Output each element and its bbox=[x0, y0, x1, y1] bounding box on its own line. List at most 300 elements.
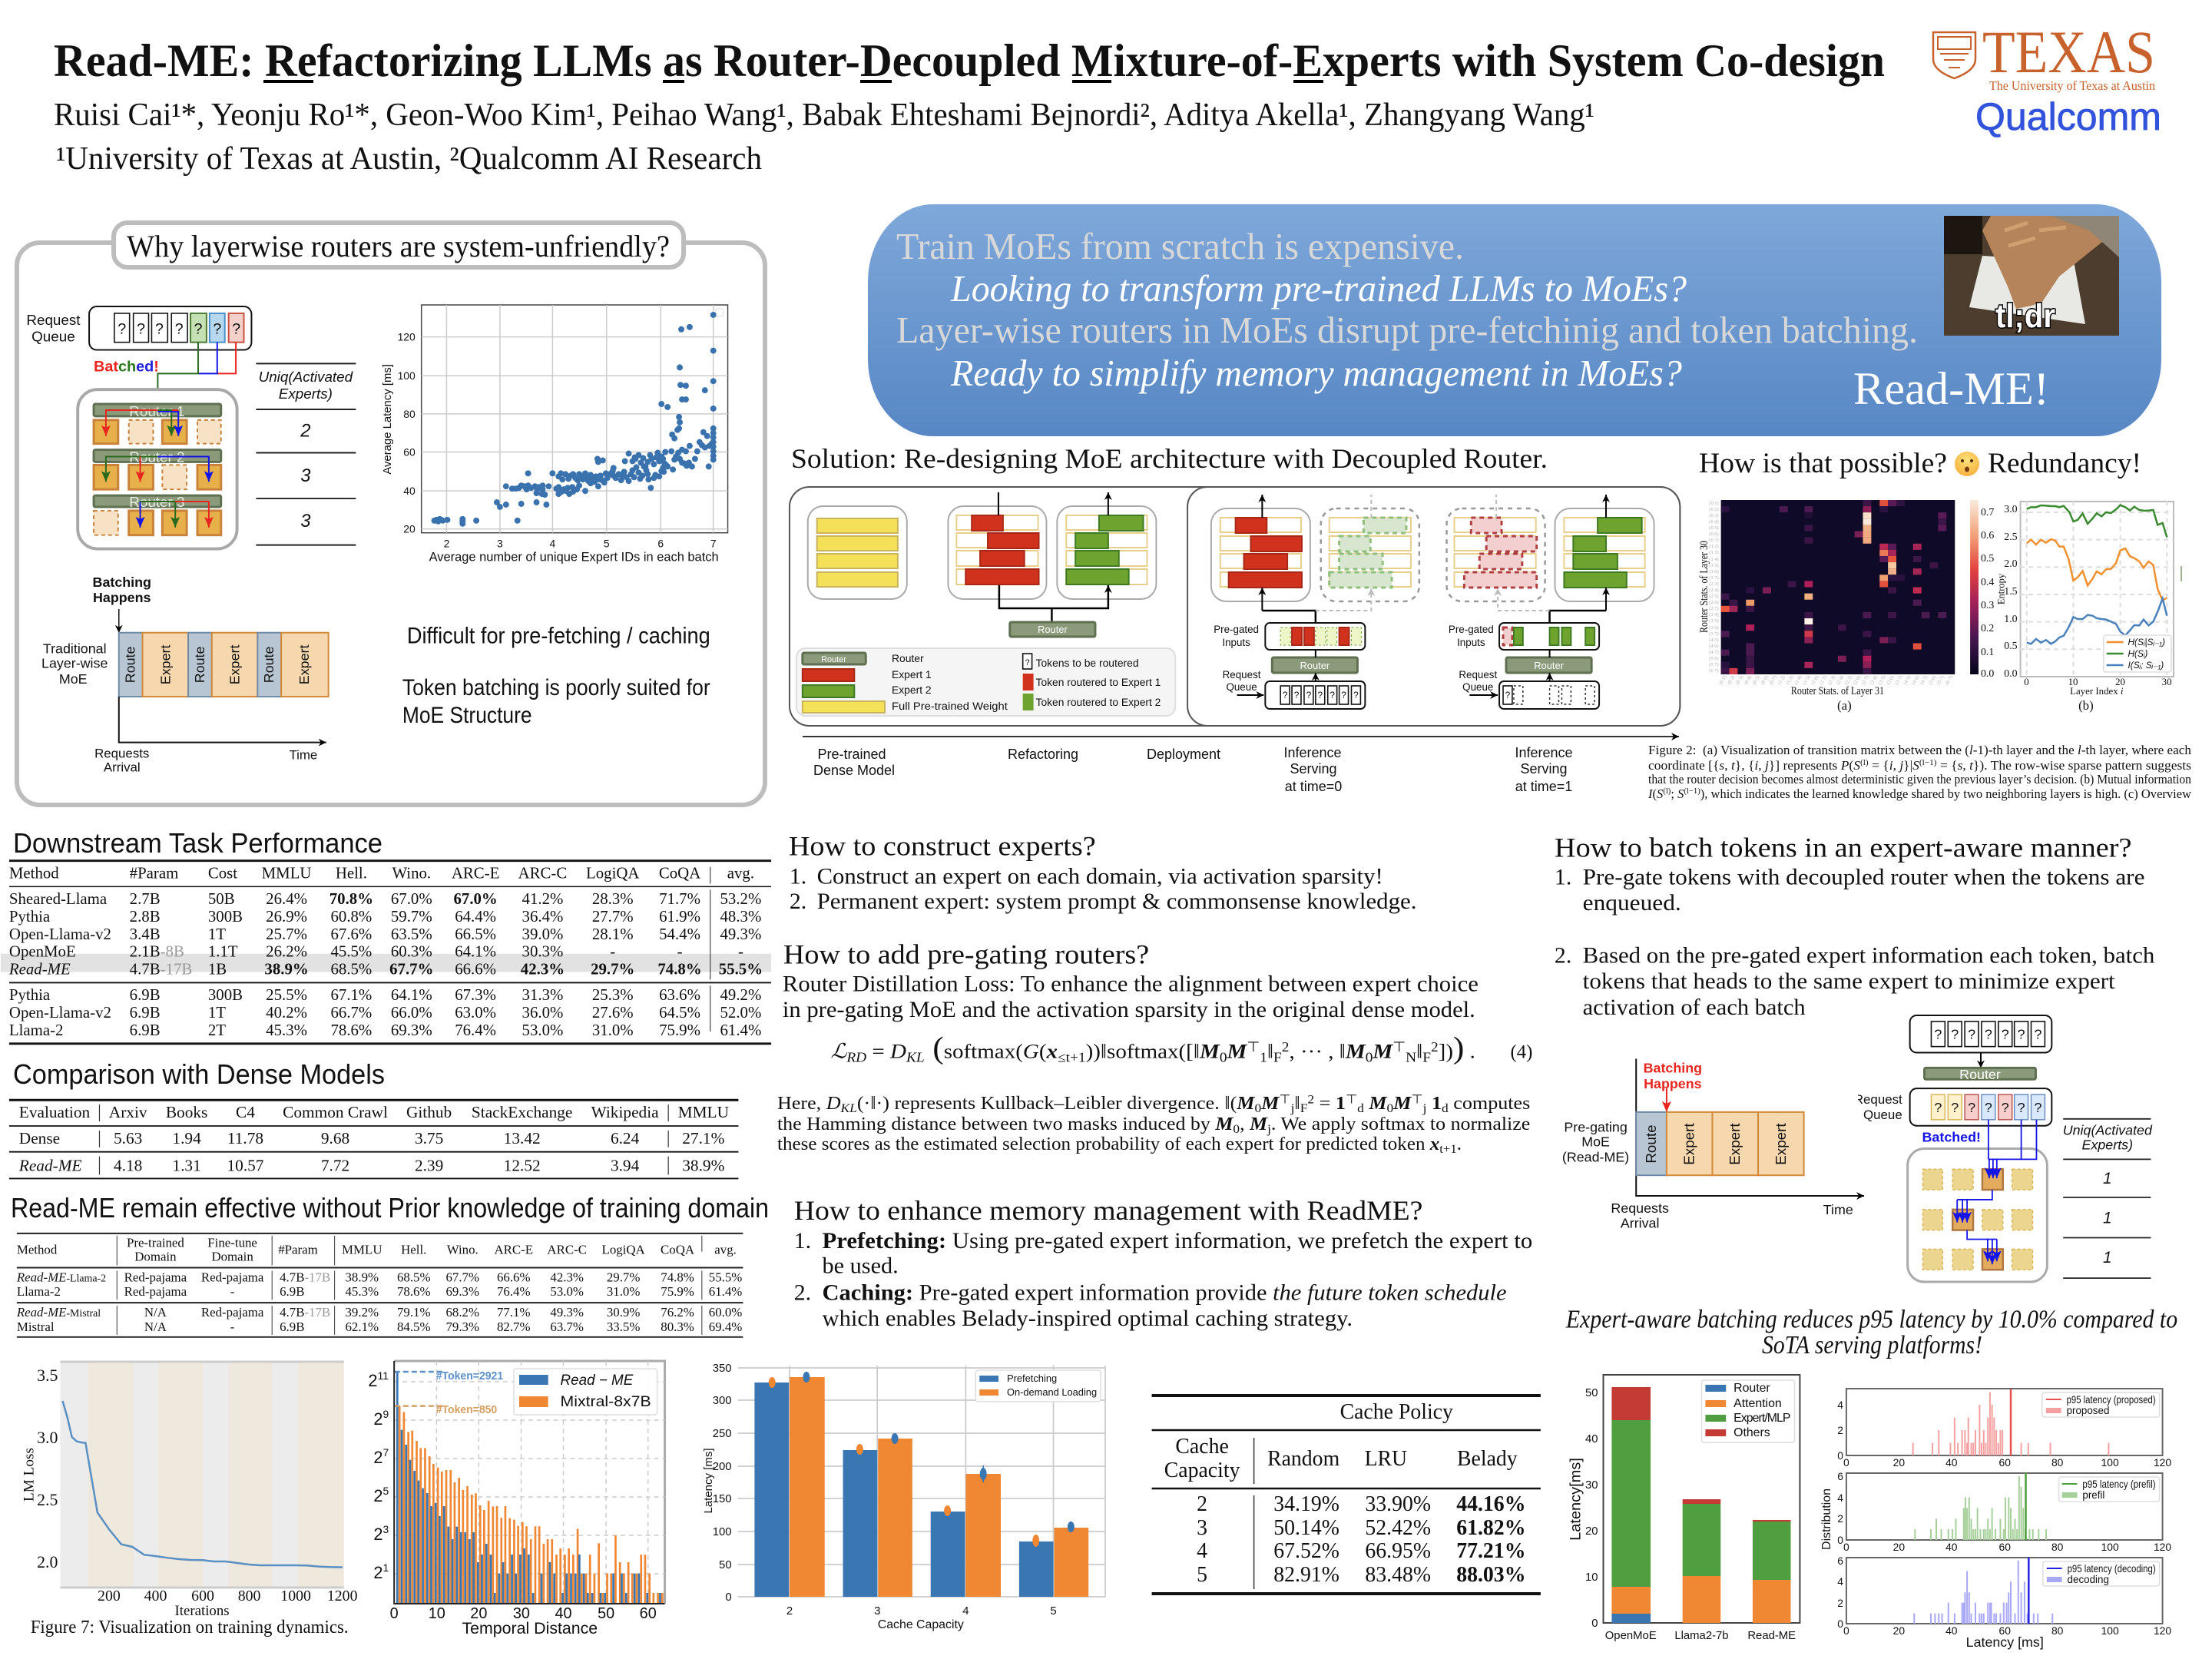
heatmap column tick labels: (2 5) bbox=[1844, 674, 1853, 686]
equation 4: ))‖softmax([‖ bbox=[1086, 1040, 1200, 1063]
equation 4: ⊤ bbox=[1392, 1039, 1406, 1055]
scatter chart: latency vs unique experts: Average Latency [ms] bbox=[382, 364, 394, 475]
equation 4: M bbox=[1372, 1040, 1393, 1063]
bar chart: temporal distance histogram: 30 bbox=[513, 1605, 530, 1622]
histogram: proposed: 40 bbox=[1945, 1456, 1958, 1469]
table: downstream task performance: avg. bbox=[727, 864, 754, 882]
equation explanation: d bbox=[1357, 1102, 1364, 1115]
histogram: proposed: proposed bbox=[2067, 1405, 2109, 1416]
batching timeline: traditional layer-wise MoE: Expert bbox=[227, 645, 243, 684]
table: no prior knowledge: Read-ME-Mistral bbox=[16, 1305, 101, 1320]
equation 4: F bbox=[1273, 1050, 1282, 1065]
affiliations: ¹University of Texas at Austin, ²Qualcomm AI Research bbox=[56, 141, 762, 177]
deployment at time 0: Queue bbox=[1226, 681, 1257, 693]
batching timeline: traditional layer-wise MoE: Happens bbox=[93, 590, 151, 605]
section: how to enhance memory management: be used. bbox=[823, 1253, 899, 1279]
equation explanation: d bbox=[1442, 1102, 1449, 1115]
section: how to construct experts bbox=[789, 831, 1416, 914]
equation explanation bbox=[777, 1093, 1530, 1156]
line chart: entropy per layer: 20 bbox=[2115, 676, 2125, 687]
histogram legend: Read − ME bbox=[561, 1373, 634, 1389]
table: cache policy: 3 bbox=[1197, 1516, 1207, 1540]
section: how to batch tokens bbox=[1555, 833, 2154, 1020]
table: downstream task performance: 59.7% bbox=[391, 907, 432, 926]
batching note: Token batching is poorly suited for bbox=[402, 675, 710, 700]
legend: Full Pre-trained Weight bbox=[892, 700, 1008, 712]
table: no prior knowledge: 79.1% bbox=[397, 1305, 431, 1320]
image: cat reading a book bbox=[1944, 216, 2119, 336]
table: no prior knowledge: Red-pajama bbox=[124, 1270, 187, 1284]
legend: Expert 1 bbox=[892, 668, 932, 680]
bar chart: temporal distance histogram: 11 bbox=[378, 1369, 389, 1382]
bar chart legend: On-demand Loading bbox=[1007, 1386, 1097, 1398]
table: downstream task performance: 74.8% bbox=[657, 960, 702, 979]
diagram: decoupled router architecture bbox=[790, 487, 1680, 726]
heatmap column tick labels: (3 7) bbox=[1894, 674, 1904, 686]
bar chart: temporal distance histogram: #Token=2921 bbox=[436, 1369, 503, 1382]
router stack bbox=[78, 389, 237, 549]
request queue tokens: ? bbox=[155, 321, 164, 338]
timeline stage labels: Inference bbox=[1515, 745, 1573, 760]
legend: Tokens to be routered bbox=[1036, 657, 1139, 669]
router stack: Router 3 bbox=[129, 494, 185, 510]
bar chart: cache capacity latency: 350 bbox=[713, 1362, 732, 1375]
table: downstream task performance: 31.0% bbox=[592, 1021, 634, 1039]
table: comparison with dense models: Wikipedia bbox=[591, 1103, 659, 1121]
batching timeline: pre-gating MoE: Expert bbox=[1681, 1123, 1697, 1165]
batching timeline: traditional layer-wise MoE: Route bbox=[192, 646, 207, 683]
line chart legend bbox=[2104, 635, 2171, 672]
line chart: entropy per layer: 3.0 bbox=[2004, 504, 2018, 515]
latency reduction statement bbox=[1565, 1306, 2177, 1359]
table: downstream task performance bbox=[1, 861, 771, 1044]
section: how to construct experts: How to construct experts? bbox=[789, 831, 1096, 862]
table: downstream task performance: 53.2% bbox=[720, 889, 761, 908]
equation 4: F bbox=[1422, 1050, 1431, 1065]
deployment at time 0: ? bbox=[1317, 690, 1323, 700]
table: downstream task performance: 26.9% bbox=[266, 907, 307, 926]
scatter chart: latency vs unique experts: 80 bbox=[403, 408, 416, 420]
heatmap column tick labels: (1 3) bbox=[1785, 674, 1795, 686]
histogram: prefil: 40 bbox=[1945, 1541, 1958, 1553]
banner text: Train MoEs from scratch is expensive. bbox=[896, 225, 1464, 267]
equation explanation: M bbox=[1236, 1094, 1255, 1114]
banner text: Ready to simplify memory management in MoEs? bbox=[950, 352, 1682, 394]
table: cache policy: 61.82% bbox=[1456, 1516, 1525, 1540]
unique activated experts table (read-me): 1 bbox=[2103, 1249, 2112, 1267]
bar chart: temporal distance histogram: 2 bbox=[373, 1525, 383, 1544]
heatmap row tick labels: (4 7) bbox=[1709, 650, 1719, 655]
table: no prior knowledge: 4.7B-17B bbox=[280, 1305, 330, 1320]
histogram: decoding: 20 bbox=[1893, 1624, 1905, 1637]
line chart: entropy per layer: 10 bbox=[2068, 676, 2078, 687]
histogram: decoding: p95 latency (decoding) bbox=[2068, 1563, 2156, 1575]
line chart: entropy per layer: (b) bbox=[2078, 698, 2094, 713]
equation explanation: ⊤ bbox=[1279, 1093, 1291, 1106]
stacked bar chart: latency breakdown: Latency[ms] bbox=[1568, 1458, 1584, 1541]
table: downstream task performance: 50B bbox=[208, 889, 235, 908]
router stack: Router 2 bbox=[129, 449, 185, 465]
logo: University of Texas: TEXAS bbox=[1982, 18, 2155, 85]
table: cache policy: 83.48% bbox=[1365, 1563, 1431, 1587]
timeline stage labels: at time=1 bbox=[1515, 779, 1572, 794]
table: downstream task performance: 2.8B bbox=[130, 907, 161, 926]
authors: Ruisi Cai¹*, Yeonju Ro¹*, Geon-Woo Kim¹, Peihao Wang¹, Babak Ehteshami Bejnordi², Aditya Akella¹, Zhangyang Wang¹ bbox=[54, 98, 1594, 133]
equation 4: KL bbox=[906, 1050, 925, 1065]
scatter chart: latency vs unique experts: 40 bbox=[403, 485, 416, 497]
table: downstream task performance: 27.6% bbox=[592, 1003, 634, 1022]
table: downstream task performance: 66.5% bbox=[455, 925, 496, 943]
table: comparison with dense models: 1.31 bbox=[172, 1157, 201, 1175]
histogram: decoding: 6 bbox=[1837, 1555, 1843, 1567]
table: downstream task performance: 1T bbox=[208, 925, 226, 943]
deployment at time 0: ? bbox=[1341, 690, 1346, 700]
equation 4: 1 bbox=[1260, 1050, 1267, 1065]
bar chart: temporal distance histogram: Temporal Distance bbox=[462, 1620, 598, 1637]
table: downstream task performance: 42.3% bbox=[521, 960, 565, 979]
table: no prior knowledge: N/A bbox=[144, 1305, 167, 1320]
heading: how is that possible: Redundancy! bbox=[1988, 448, 2141, 479]
unique activated experts table (read-me) bbox=[2063, 1119, 2153, 1278]
equation explanation: ⊤ bbox=[1411, 1093, 1423, 1106]
diagram: expert-aware batching: ? bbox=[1968, 1100, 1975, 1115]
table: no prior knowledge: 6.9B bbox=[280, 1284, 304, 1299]
bar chart: cache capacity latency: 200 bbox=[713, 1460, 732, 1473]
heatmap row tick labels: (3 7) bbox=[1709, 631, 1719, 637]
table: downstream task performance: 3.4B bbox=[130, 925, 161, 943]
table: no prior knowledge: Red-pajama bbox=[201, 1270, 264, 1284]
histogram: decoding: 2 bbox=[1837, 1597, 1843, 1609]
table: downstream task performance: MMLU bbox=[262, 864, 311, 882]
bar chart: temporal distance histogram: 0 bbox=[390, 1605, 399, 1622]
histogram: prefil: 80 bbox=[2051, 1541, 2064, 1553]
table: no prior knowledge bbox=[16, 1233, 743, 1337]
section: how to batch tokens: tokens that heads to the same expert to minimize expert bbox=[1583, 969, 2115, 994]
deployment at time 0: Pre-gated bbox=[1214, 624, 1259, 635]
line chart: training dynamics: 2.0 bbox=[37, 1552, 58, 1571]
table: cache policy: 2 bbox=[1197, 1492, 1207, 1516]
table: no prior knowledge: Red-pajama bbox=[124, 1284, 187, 1299]
bar chart: temporal distance histogram: 2 bbox=[368, 1371, 378, 1390]
table: no prior knowledge: Llama-2 bbox=[17, 1284, 61, 1299]
bar chart: temporal distance histogram: 7 bbox=[383, 1446, 389, 1459]
equation explanation: j bbox=[1267, 1123, 1271, 1136]
timeline stage labels: Refactoring bbox=[1008, 747, 1078, 762]
table: downstream task performance: 28.3% bbox=[592, 889, 634, 908]
equation 4: ]) bbox=[1439, 1040, 1453, 1063]
batching timeline: traditional layer-wise MoE: Route bbox=[123, 646, 138, 683]
pre-trained dense model bbox=[808, 506, 907, 599]
table: cache policy: 44.16% bbox=[1456, 1492, 1525, 1516]
section: how to enhance memory management: How to enhance memory management with ReadME? bbox=[794, 1195, 1422, 1226]
table: cache policy: 50.14% bbox=[1273, 1516, 1339, 1540]
heatmap column tick labels: (5 7) bbox=[1936, 674, 1945, 686]
heatmap column tick labels: (0 4) bbox=[1743, 674, 1753, 686]
histogram: proposed: p95 latency (proposed) bbox=[2067, 1394, 2156, 1406]
heatmap column tick labels: (3 6) bbox=[1886, 674, 1896, 686]
timeline stage labels: Deployment bbox=[1147, 747, 1220, 762]
histogram: decoding bbox=[1837, 1555, 2171, 1637]
scatter chart: latency vs unique experts: 5 bbox=[604, 538, 610, 550]
timeline stage labels bbox=[813, 745, 1573, 794]
table: downstream task performance: 75.9% bbox=[659, 1021, 700, 1039]
heatmap column tick labels: (0 6) bbox=[1760, 674, 1770, 686]
request queue label: Queue bbox=[31, 329, 75, 345]
bar chart: temporal distance histogram: #Token=850 bbox=[436, 1403, 497, 1416]
equation explanation: 1 bbox=[1336, 1094, 1346, 1114]
section: how to enhance memory management: 1. bbox=[794, 1228, 811, 1253]
heatmap row tick labels: (0 2) bbox=[1709, 507, 1719, 512]
heatmap column tick labels: (4 7) bbox=[1919, 674, 1929, 686]
section: how to enhance memory management: Caching: Pre-gated expert information provide the future token schedule bbox=[823, 1280, 1507, 1305]
timeline stage labels: Pre-trained bbox=[817, 747, 886, 762]
histogram: prefil: 4 bbox=[1837, 1492, 1843, 1504]
deployment at time 0: ? bbox=[1294, 690, 1300, 700]
table: comparison with dense models: 9.68 bbox=[321, 1129, 349, 1147]
table: downstream task performance: 6.9B bbox=[130, 1003, 161, 1022]
deployment at time 0: ? bbox=[1330, 690, 1335, 700]
bar chart: cache capacity latency: 50 bbox=[719, 1558, 732, 1571]
stacked bar legend: Others bbox=[1734, 1426, 1770, 1439]
equation explanation: j bbox=[1290, 1102, 1294, 1115]
line chart: training dynamics: LM Loss bbox=[22, 1448, 38, 1502]
title: Read-ME: Refactorizing LLMs as Router-Decoupled Mixture-of-Experts with System Co-design bbox=[54, 35, 1885, 86]
scatter chart: latency vs unique experts: 20 bbox=[403, 523, 416, 535]
table: downstream task performance: 31.3% bbox=[522, 985, 563, 1004]
legend: Expert 2 bbox=[892, 684, 932, 696]
router and arrows for refactoring: Router bbox=[1038, 624, 1068, 635]
Read-ME callout: Read-ME! bbox=[1853, 363, 2049, 414]
table: no prior knowledge: Mistral bbox=[17, 1320, 55, 1334]
batched label: Batched! bbox=[94, 358, 159, 375]
line chart: training dynamics: 800 bbox=[238, 1588, 261, 1604]
table: no prior knowledge: Hell. bbox=[401, 1243, 426, 1257]
equation explanation: Here, D bbox=[777, 1094, 839, 1114]
heading: solution: Solution: Re-designing MoE architecture with Decoupled Router. bbox=[791, 443, 1548, 474]
batching timeline: pre-gating MoE bbox=[1562, 1058, 1864, 1231]
stacked bar legend: Expert/MLP bbox=[1734, 1412, 1791, 1425]
heatmap row tick labels: (4 5) bbox=[1709, 637, 1719, 643]
equation explanation: (·‖·) represents Kullback–Leibler divergence. ‖( bbox=[857, 1094, 1237, 1114]
table: downstream task performance: 300B bbox=[208, 907, 243, 926]
table: downstream task performance: - bbox=[738, 942, 743, 961]
section: how to enhance memory management bbox=[794, 1195, 1532, 1331]
table: downstream task performance: 67.6% bbox=[330, 925, 372, 943]
histogram: proposed: 20 bbox=[1893, 1456, 1905, 1469]
refactored expert 2 bbox=[1057, 506, 1156, 599]
histogram: prefil: 60 bbox=[1999, 1541, 2011, 1553]
equation explanation: F bbox=[1300, 1102, 1308, 1115]
request queue tokens: ? bbox=[194, 321, 202, 338]
histograms: p95 latency: Latency [ms] bbox=[1966, 1634, 2044, 1650]
table: comparison with dense models: 10.57 bbox=[227, 1157, 264, 1175]
section: how to add pre-gating routers: in pre-gating MoE and the activation sparsity in the original dense model. bbox=[783, 997, 1475, 1022]
table: comparison with dense models: 27.1% bbox=[682, 1129, 725, 1147]
table: downstream task performance: Llama-2 bbox=[9, 1021, 63, 1039]
equation 4: 0 bbox=[1220, 1050, 1227, 1065]
diagram: expert-aware batching bbox=[1854, 1015, 2051, 1282]
timeline stage labels: Serving bbox=[1290, 761, 1337, 777]
histogram: decoding: 120 bbox=[2154, 1624, 2171, 1637]
table: downstream task performance: 25.5% bbox=[266, 985, 307, 1004]
scatter chart: latency vs unique experts bbox=[382, 305, 728, 564]
equation explanation: t+1 bbox=[1439, 1143, 1457, 1156]
bar chart: cache capacity latency: 2 bbox=[786, 1604, 793, 1618]
diagram: expert-aware batching: ? bbox=[2018, 1027, 2025, 1042]
histogram: prefil bbox=[1837, 1470, 2171, 1553]
colorbar: 0.0 bbox=[1981, 668, 1994, 680]
request queue label: Request bbox=[26, 312, 81, 328]
table: no prior knowledge: 80.3% bbox=[661, 1320, 694, 1334]
unique activated experts table bbox=[256, 363, 356, 545]
table: no prior knowledge: 74.8% bbox=[661, 1270, 694, 1284]
table: comparison with dense models: Github bbox=[406, 1103, 452, 1121]
table: comparison with dense models: 2.39 bbox=[415, 1157, 443, 1175]
table: no prior knowledge: - bbox=[230, 1320, 234, 1334]
table: no prior knowledge: 75.9% bbox=[661, 1284, 694, 1299]
equation explanation: M bbox=[1260, 1094, 1280, 1114]
diagram: expert-aware batching: Router bbox=[1959, 1067, 2001, 1082]
deployment at time 0 bbox=[1211, 495, 1419, 709]
timeline arrow bbox=[803, 736, 1679, 737]
heatmap column tick labels: (2 3) bbox=[1827, 674, 1836, 686]
table: downstream task performance: 60.8% bbox=[330, 907, 372, 926]
table: downstream task performance: #Param bbox=[130, 864, 178, 882]
table: downstream task performance: Sheared-Llama bbox=[9, 889, 107, 908]
deployment at time 1: Request bbox=[1459, 669, 1497, 680]
unique activated experts table: 3 bbox=[300, 511, 311, 531]
table: downstream task performance: 6.9B bbox=[130, 985, 161, 1004]
batching timeline: pre-gating MoE: Happens bbox=[1644, 1076, 1702, 1091]
banner text: Looking to transform pre-trained LLMs to MoEs? bbox=[950, 267, 1687, 310]
table: downstream task performance: 2.1B-8B bbox=[130, 942, 184, 961]
heatmap column tick labels: (4 6) bbox=[1911, 674, 1920, 686]
deployment at time 1 bbox=[1447, 495, 1654, 709]
table: downstream task performance: 76.4% bbox=[455, 1021, 496, 1039]
table: no prior knowledge: 62.1% bbox=[346, 1320, 379, 1334]
table: downstream task performance: 49.2% bbox=[720, 985, 761, 1004]
stacked bar chart: latency breakdown bbox=[1568, 1375, 1800, 1642]
diagram: expert-aware batching: ? bbox=[1951, 1027, 1959, 1042]
stacked bar chart: latency breakdown: Llama2-7b bbox=[1674, 1629, 1729, 1642]
table: no prior knowledge: 60.0% bbox=[709, 1305, 742, 1320]
line chart: entropy per layer: 0.5 bbox=[2004, 641, 2018, 652]
heatmap row tick labels: (0 4) bbox=[1709, 519, 1719, 525]
table: downstream task performance: 45.5% bbox=[330, 942, 372, 961]
deployment at time 1: Router bbox=[1534, 660, 1565, 671]
histogram: prefil: 20 bbox=[1893, 1541, 1905, 1553]
line chart: entropy per layer bbox=[1996, 502, 2174, 713]
table: downstream task performance: 67.0% bbox=[391, 889, 432, 908]
table: downstream task performance: OpenMoE bbox=[9, 942, 76, 961]
table: downstream task performance: - bbox=[677, 942, 683, 961]
table: no prior knowledge: 69.3% bbox=[445, 1284, 479, 1299]
table: no prior knowledge: 33.5% bbox=[607, 1320, 640, 1334]
table: downstream task performance: 67.3% bbox=[455, 985, 496, 1004]
heatmap column tick labels: (2 6) bbox=[1853, 674, 1862, 686]
diagram: expert-aware batching: Request bbox=[1854, 1092, 1902, 1107]
figure 2 caption: (l−1) bbox=[1919, 758, 1937, 767]
histogram: proposed: 4 bbox=[1837, 1399, 1843, 1411]
diagram: expert-aware batching: ? bbox=[1985, 1027, 1992, 1042]
histogram: proposed: 80 bbox=[2051, 1456, 2064, 1469]
table: no prior knowledge: 78.6% bbox=[397, 1284, 431, 1299]
table: comparison with dense models: C4 bbox=[236, 1103, 255, 1121]
histogram: prefil: 0 bbox=[1837, 1534, 1843, 1546]
table: downstream task performance: 64.1% bbox=[391, 985, 432, 1004]
heatmap column tick labels: (1 7) bbox=[1819, 674, 1828, 686]
histogram: proposed bbox=[1837, 1389, 2171, 1469]
table: downstream task performance: 41.2% bbox=[522, 889, 563, 908]
table: no prior knowledge: 67.7% bbox=[445, 1270, 479, 1284]
histograms: p95 latency: Distribution bbox=[1820, 1488, 1833, 1550]
table: no prior knowledge: 79.3% bbox=[445, 1320, 479, 1334]
heatmap column tick labels: (6 7) bbox=[1945, 674, 1954, 686]
table: downstream task performance: 64.1% bbox=[455, 942, 496, 961]
heatmap column tick labels: (2 7) bbox=[1861, 674, 1870, 686]
table: downstream task performance: Open-Llama-v2 bbox=[9, 925, 111, 943]
timeline stage labels: at time=0 bbox=[1285, 779, 1342, 794]
heatmap column tick labels: (4 5) bbox=[1902, 674, 1912, 686]
heatmap row tick labels: (4 6) bbox=[1709, 644, 1719, 649]
table: comparison with dense models: MMLU bbox=[678, 1103, 729, 1121]
line chart: entropy per layer: Layer Index i bbox=[2070, 685, 2124, 697]
histogram: proposed: 60 bbox=[1999, 1456, 2011, 1469]
figure 2 caption: = { bbox=[1937, 758, 1958, 773]
figure 2 caption: coordinate [{s, t}, {i, j}] represents P(S bbox=[1648, 758, 1860, 773]
table: no prior knowledge: 84.5% bbox=[397, 1320, 431, 1334]
batching timeline: traditional layer-wise MoE bbox=[41, 575, 329, 774]
equation explanation: , bbox=[1240, 1114, 1250, 1134]
equation explanation: ‖ bbox=[1294, 1094, 1300, 1114]
batching timeline: pre-gating MoE: Requests bbox=[1611, 1200, 1669, 1216]
figure 2 caption: = { bbox=[1869, 758, 1889, 773]
equation 4: ≤t+1 bbox=[1058, 1050, 1086, 1065]
heatmap row tick labels: (2 7) bbox=[1709, 606, 1719, 611]
table: downstream task performance: 63.0% bbox=[455, 1003, 496, 1022]
table: comparison with dense models: 11.78 bbox=[227, 1129, 263, 1147]
heatmap column tick labels: (3 5) bbox=[1877, 674, 1887, 686]
heatmap column tick labels: (0 1) bbox=[1718, 674, 1727, 686]
table: cache policy: 66.95% bbox=[1365, 1539, 1431, 1563]
table: comparison with dense models: 6.24 bbox=[611, 1129, 640, 1147]
equation explanation: M bbox=[1249, 1114, 1268, 1134]
equation explanation: 1 bbox=[1426, 1094, 1442, 1114]
diagram: expert-aware batching: ? bbox=[1934, 1100, 1942, 1115]
table: no prior knowledge: avg. bbox=[714, 1243, 737, 1257]
table: downstream task performance: 69.3% bbox=[391, 1021, 432, 1039]
equation explanation: computes bbox=[1449, 1094, 1530, 1114]
table: downstream task performance: 4.7B-17B bbox=[130, 960, 192, 979]
line chart: entropy per layer: 0 bbox=[2024, 676, 2029, 687]
table: no prior knowledge: 53.0% bbox=[550, 1284, 584, 1299]
table: cache policy: 67.52% bbox=[1273, 1539, 1339, 1563]
table: no prior knowledge: 49.3% bbox=[550, 1305, 584, 1320]
table: no prior knowledge: 31.0% bbox=[607, 1284, 640, 1299]
table: comparison with dense models: Books bbox=[166, 1103, 207, 1121]
equation 4: ⊤ bbox=[1247, 1039, 1260, 1055]
table: downstream task performance: Read-ME bbox=[8, 960, 71, 979]
batching timeline: pre-gating MoE: Route bbox=[1643, 1124, 1659, 1164]
section: how to add pre-gating routers: Router Distillation Loss: To enhance the alignment between expert choice bbox=[783, 971, 1479, 996]
bar chart: temporal distance histogram: 1 bbox=[383, 1561, 389, 1574]
scatter chart: latency vs unique experts: 7 bbox=[710, 538, 717, 550]
figure 2 caption bbox=[1647, 743, 2192, 801]
table: downstream task performance: 36.4% bbox=[522, 907, 563, 926]
line chart: training dynamics: 400 bbox=[144, 1588, 167, 1604]
table: no prior knowledge: 82.7% bbox=[497, 1320, 531, 1334]
table: cache policy: 4 bbox=[1197, 1539, 1207, 1563]
